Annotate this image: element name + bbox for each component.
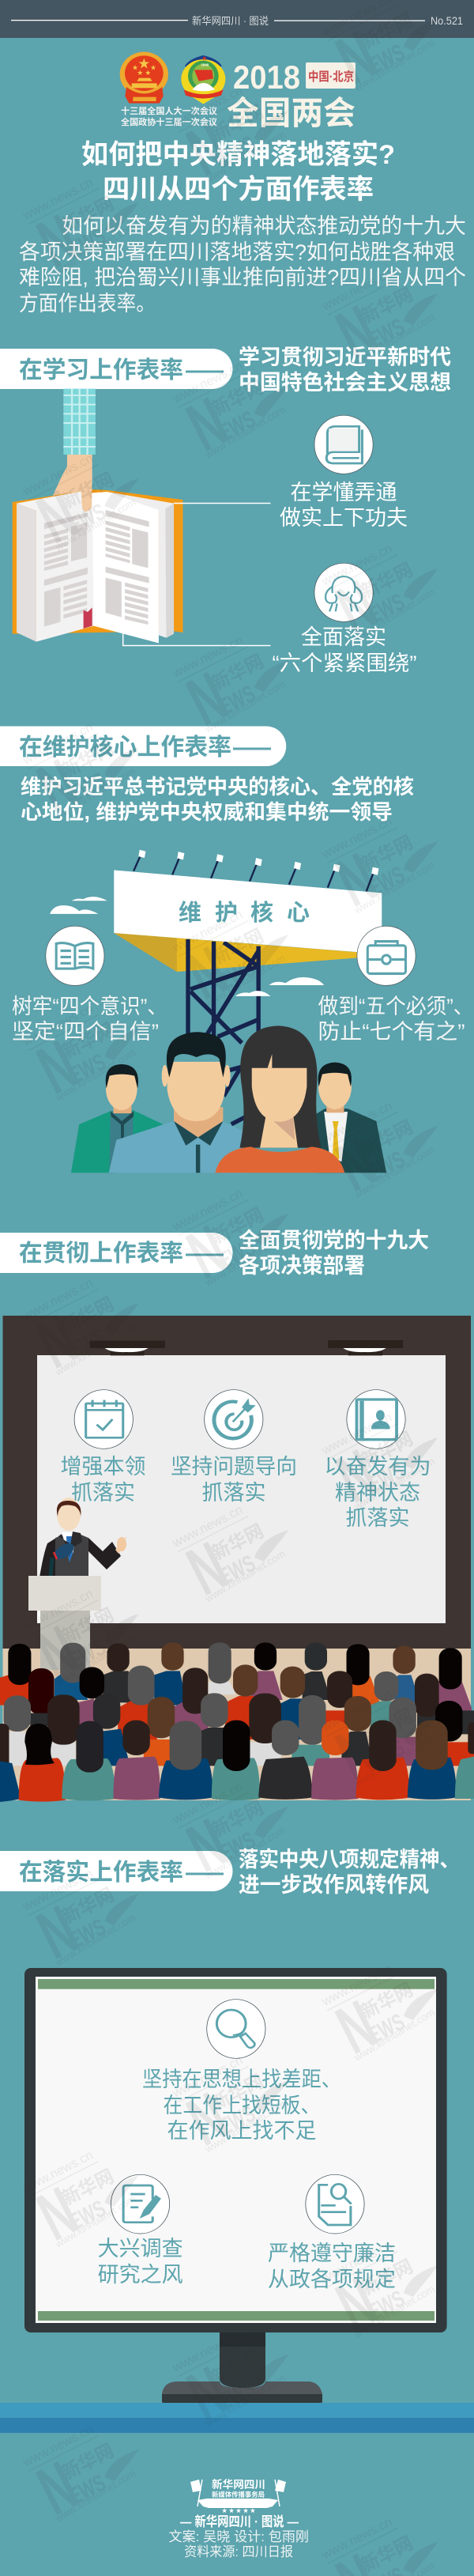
monitor text: left: 研究之风: [98, 2263, 183, 2287]
screen text: column 2: 抓落实: [202, 1481, 265, 1505]
watermarks: www.xinhuanet.com: [352, 859, 437, 916]
watermarks: N: [26, 476, 89, 558]
watermarks: www.xinhuanet.com: [352, 2006, 437, 2064]
watermarks: www.news.cn: [319, 1962, 394, 2009]
icon: contact book: [347, 1390, 405, 1449]
footer credits: 文案: 吴晓 设计: 包雨刚: [169, 2529, 309, 2544]
icon: national emblem: [120, 52, 168, 104]
section 2 subtitle: 心地位, 维护党中央权威和集中统一领导: [21, 800, 393, 824]
person: left man: [71, 1064, 164, 1173]
text: study: 做实上下功夫: [280, 506, 408, 530]
intro paragraph: 各项决策部署在四川落地落实?如何战胜各种艰: [19, 240, 455, 264]
watermarks: N: [325, 1435, 388, 1517]
watermarks: www.xinhuanet.com: [52, 1046, 137, 1104]
watermarks: www.news.cn: [170, 1187, 245, 1234]
watermarks: N: [26, 2447, 89, 2529]
monitor text: top: 在工作上找短板、: [163, 2094, 321, 2117]
section 4 subtitle: [239, 1848, 460, 1897]
middle row: [28, 1664, 442, 1739]
section 1 heading pill: 在学习上作表率: [19, 357, 183, 383]
watermarks: www.xinhuanet.com: [202, 1547, 288, 1605]
text: four consciousness: 坚定“四个自信”: [12, 1020, 159, 1044]
section 4 subtitle: 落实中央八项规定精神、: [239, 1848, 460, 1872]
watermarks: N: [176, 932, 239, 1014]
footer credits: — 新华网四川 · 图说 —: [180, 2514, 299, 2529]
icon: people embrace: [314, 563, 373, 621]
watermarks: EWS: [364, 589, 409, 629]
watermarks: EWS: [215, 955, 260, 995]
watermarks: N: [176, 1211, 239, 1294]
icon: CPPCC emblem: [181, 55, 225, 104]
watermarks: www.news.cn: [319, 1099, 394, 1146]
screen text: column 1: 增强本领: [60, 1455, 145, 1479]
section 4 heading pill: ——: [186, 1860, 224, 1886]
monitor text: left: [98, 2237, 183, 2287]
watermarks: www.news.cn: [170, 1503, 245, 1551]
text: study: [280, 481, 408, 530]
watermarks: www.news.cn: [319, 2238, 394, 2286]
monitor text: top: 坚持在思想上找差距、: [142, 2068, 341, 2091]
text: four consciousness: [12, 995, 167, 1044]
watermarks: EWS: [215, 2375, 260, 2415]
screen text: column 3: 精神状态: [335, 1481, 420, 1505]
watermarks: www.news.cn: [319, 1687, 394, 1735]
watermarks: N: [325, 1124, 388, 1206]
watermarks: 新华网: [358, 9, 416, 54]
watermarks: www.xinhuanet.com: [202, 1824, 288, 1882]
screen text: column 3: [324, 1455, 431, 1530]
watermarks: EWS: [65, 2196, 110, 2236]
monitor text: top: 在作风上找不足: [167, 2119, 316, 2143]
icon: target: [205, 1390, 263, 1449]
text: study: 在学懂弄通: [291, 481, 397, 504]
watermarks: EWS: [364, 314, 409, 354]
monitor text: right: 严格遵守廉洁: [268, 2242, 396, 2265]
watermarks: 新华网: [209, 2071, 267, 2115]
watermarks: www.news.cn: [319, 1411, 394, 1458]
watermarks: www.news.cn: [21, 176, 96, 223]
watermarks: EWS: [65, 223, 110, 263]
watermarks: 新华网: [358, 2533, 416, 2576]
watermarks: www.xinhuanet.com: [202, 403, 288, 461]
watermarks: N: [325, 839, 388, 921]
clouds: [50, 897, 324, 996]
icon: national emblem: ★: [137, 70, 144, 77]
screen text: column 1: [60, 1455, 145, 1505]
illustration: audience crowd: [0, 1642, 474, 1802]
watermarks: www.xinhuanet.com: [52, 765, 137, 822]
watermarks: N: [325, 291, 388, 373]
watermarks: www.xinhuanet.com: [202, 2372, 288, 2430]
watermarks: EWS: [215, 1234, 260, 1275]
watermarks: www.news.cn: [319, 2515, 394, 2563]
watermarks: www.xinhuanet.com: [52, 496, 137, 553]
intro paragraph: 方面作出表率。: [19, 292, 156, 315]
watermarks: N: [26, 1026, 89, 1109]
watermarks: www.xinhuanet.com: [202, 1231, 288, 1289]
watermarks: N: [26, 745, 89, 827]
screen: [37, 1355, 446, 1623]
section 1 subtitle: 学习贯彻习近平新时代: [239, 346, 451, 369]
section 3 heading pill: [0, 1233, 232, 1273]
watermarks: N: [176, 1528, 239, 1610]
watermarks: N: [176, 658, 239, 740]
intro paragraph: 难险阻, 把治蜀兴川事业推向前进?四川省从四个: [19, 266, 466, 289]
watermarks: www.news.cn: [319, 814, 394, 862]
person: right man: [314, 1063, 386, 1173]
watermarks: www.xinhuanet.com: [202, 952, 288, 1010]
watermarks: www.news.cn: [170, 84, 245, 131]
footer logo: 新媒体传播事务局: [212, 2491, 265, 2499]
icon: national emblem: ★: [150, 64, 156, 71]
watermarks: www.xinhuanet.com: [52, 220, 137, 278]
watermarks: www.xinhuanet.com: [52, 1911, 137, 1969]
watermarks: 新华网: [209, 925, 267, 969]
watermarks: N: [26, 1301, 89, 1383]
screen text: column 1: 抓落实: [71, 1481, 135, 1505]
watermarks: 新华网: [58, 1294, 118, 1338]
header bar: No.521: [431, 15, 463, 27]
watermarks: www.news.cn: [170, 633, 245, 681]
text: five musts: [318, 995, 474, 1044]
watermarks: www.xinhuanet.com: [202, 2098, 288, 2155]
section 3 heading pill: ——: [186, 1241, 224, 1267]
watermarks: N: [325, 17, 388, 99]
watermarks: www.xinhuanet.com: [52, 1320, 137, 1378]
watermarks: EWS: [65, 1914, 110, 1955]
watermarks: 新华网: [358, 284, 416, 328]
watermarks: 新华网: [358, 1979, 416, 2023]
emblem caption: [121, 105, 217, 127]
sleeve: [63, 389, 96, 455]
watermarks: 新华网: [209, 2345, 267, 2389]
watermarks: www.xinhuanet.com: [202, 678, 288, 735]
watermarks: www.xinhuanet.com: [52, 2467, 137, 2525]
watermarks: N: [325, 2263, 388, 2345]
stage lights: [90, 1340, 403, 1355]
intro paragraph: 如何以奋发有为的精神状态推动党的十九大: [62, 214, 466, 238]
icon: national emblem: ★: [138, 58, 150, 70]
watermarks: www.xinhuanet.com: [352, 586, 437, 644]
text: six tight: [272, 625, 417, 675]
watermarks: 新华网: [58, 2440, 118, 2484]
title: 2018 全国两会: [227, 59, 356, 131]
watermarks: EWS: [65, 2470, 110, 2510]
text: six tight: 全面落实: [301, 625, 386, 649]
section 4 heading pill: [0, 1851, 232, 1891]
watermarks: EWS: [65, 1049, 110, 1090]
watermarks: www.xinhuanet.com: [202, 128, 288, 186]
watermarks: www.xinhuanet.com: [352, 1732, 437, 1789]
watermarks: 新华网: [209, 376, 267, 421]
watermarks: 新华网: [58, 469, 118, 513]
screen text: column 2: 坚持问题导向: [171, 1455, 297, 1479]
watermarks: EWS: [215, 681, 260, 721]
watermarks: 新华网: [209, 1520, 267, 1565]
watermarks: www.news.cn: [21, 2148, 96, 2196]
emblem caption: 全国政协十三届一次会议: [121, 116, 217, 127]
icon: briefcase: [357, 926, 416, 985]
monitor: [24, 1968, 447, 2403]
watermarks: www.xinhuanet.com: [352, 1143, 437, 1201]
screen text: column 3: 抓落实: [346, 1506, 409, 1530]
section 1 heading pill: [0, 349, 232, 389]
stage wall and screen: [3, 1316, 471, 1800]
watermarks: 新华网: [58, 1019, 118, 1063]
icon: document and pen: [111, 2174, 170, 2234]
section 1 subtitle: 中国特色社会主义思想: [239, 371, 451, 395]
monitor text: left: 大兴调查: [98, 2237, 183, 2261]
watermarks: EWS: [65, 1324, 110, 1364]
main heading: 如何把中央精神落地落实?: [81, 140, 395, 170]
watermarks: N: [26, 200, 89, 282]
watermarks: www.news.cn: [21, 1002, 96, 1049]
section 3 subtitle: 全面贯彻党的十九大: [239, 1229, 429, 1252]
watermarks: N: [176, 1804, 239, 1887]
watermarks: www.xinhuanet.com: [52, 2193, 137, 2250]
section 1 heading pill: ——: [186, 357, 224, 383]
second row: [3, 1693, 474, 1766]
watermarks: EWS: [65, 1634, 110, 1675]
monitor text: top: [142, 2068, 341, 2143]
watermarks: 新华网: [58, 1884, 118, 1928]
icon: magnifier: [207, 2000, 265, 2058]
watermarks: EWS: [65, 499, 110, 539]
illustration: billboard and tower: [114, 850, 382, 1124]
watermarks: 新华网: [358, 559, 416, 603]
watermarks: EWS: [215, 2101, 260, 2141]
text: four consciousness: 树牢“四个意识”、: [12, 995, 167, 1018]
title: 2018 全国两会: 全国两会: [227, 95, 356, 131]
section 1 subtitle: [239, 346, 451, 395]
watermarks: www.news.cn: [170, 359, 245, 406]
watermarks: www.news.cn: [170, 1780, 245, 1827]
front row: [0, 1720, 474, 1802]
icon: CPPCC emblem: 1949: [201, 62, 209, 66]
icon: national emblem: ★: [145, 70, 152, 77]
icon: document and magnifier: [306, 2174, 364, 2234]
watermarks: www.news.cn: [170, 2328, 245, 2375]
header bar: [0, 0, 474, 38]
watermarks: 新华网: [209, 101, 267, 145]
illustration: speaker at podium: [40, 1498, 126, 1577]
footer credits: 资料来源: 四川日报: [184, 2544, 293, 2559]
watermarks: EWS: [364, 2009, 409, 2049]
text: six tight: “六个紧紧围绕”: [272, 652, 417, 675]
person: centre man: [109, 1032, 246, 1173]
watermarks: EWS: [364, 40, 409, 80]
footer logo: 新华网四川: [212, 2478, 265, 2491]
section 3 subtitle: [239, 1229, 429, 1278]
screen text: column 3: 以奋发有为: [324, 1455, 431, 1479]
watermarks: 新华网: [209, 1204, 267, 1248]
watermarks: 新华网: [58, 193, 118, 237]
watermarks: www.xinhuanet.com: [352, 2283, 437, 2340]
footer logo: ★ ★ ★ ★ ★: [222, 2508, 255, 2514]
watermarks: 新华网: [58, 1604, 118, 1649]
watermarks: www.news.cn: [21, 2423, 96, 2470]
desk bands: [0, 2403, 474, 2433]
watermarks: N: [26, 2173, 89, 2255]
watermarks: www.news.cn: [170, 908, 245, 955]
watermarks: EWS: [65, 768, 110, 808]
icon: CPPCC emblem: ★: [201, 56, 207, 62]
illustration: four people: [71, 1025, 386, 1173]
watermarks: EWS: [364, 1146, 409, 1187]
section 4 heading pill: 在落实上作表率: [19, 1860, 183, 1886]
section 2 heading pill: ——: [233, 735, 271, 761]
watermarks: N: [176, 2352, 239, 2434]
header bar: 新华网四川 · 图说: [192, 15, 269, 27]
emblem caption: 十三届全国人大一次会议: [121, 105, 217, 116]
back row: [0, 1642, 472, 1713]
watermarks: www.xinhuanet.com: [352, 36, 437, 94]
watermarks: EWS: [215, 406, 260, 447]
watermarks: www.news.cn: [21, 1867, 96, 1914]
intro paragraph: [19, 214, 466, 315]
section 2 subtitle: 维护习近平总书记党中央的核心、全党的核: [21, 775, 414, 799]
person: woman: [215, 1025, 344, 1173]
podium: [28, 1576, 101, 1670]
watermarks: N: [325, 566, 388, 648]
watermarks: N: [325, 1712, 388, 1794]
icon: national emblem: ★: [132, 64, 138, 71]
watermarks: EWS: [364, 862, 409, 902]
footer credits: [169, 2514, 309, 2559]
watermarks: www.news.cn: [21, 1587, 96, 1634]
watermarks: 新华网: [58, 2166, 118, 2210]
watermarks: www.news.cn: [21, 720, 96, 768]
connector lines: [123, 503, 270, 645]
main heading: [81, 140, 395, 205]
watermarks: www.xinhuanet.com: [352, 311, 437, 368]
watermarks: EWS: [215, 131, 260, 172]
watermarks: N: [176, 383, 239, 466]
watermarks: www.xinhuanet.com: [52, 1631, 137, 1689]
section 2 heading pill: 在维护核心上作表率: [19, 735, 231, 761]
watermarks: 新华网: [358, 1705, 416, 1749]
watermarks: 新华网: [209, 1797, 267, 1841]
section 2 subtitle: [21, 775, 414, 824]
section 4 subtitle: 进一步改作风转作风: [239, 1873, 429, 1897]
watermarks: N: [176, 108, 239, 191]
title: 2018 全国两会: 2018: [233, 59, 300, 96]
watermarks: www.news.cn: [319, 542, 394, 589]
watermarks: www.xinhuanet.com: [352, 1455, 437, 1513]
illustration: hand holding open book: [13, 389, 183, 643]
section 2 heading pill: [0, 726, 286, 766]
icon: calendar: [74, 1390, 133, 1449]
watermarks: EWS: [215, 1551, 260, 1591]
icon: open book: [46, 926, 104, 985]
watermarks: 新华网: [209, 651, 267, 695]
monitor text: right: 从政各项规定: [268, 2268, 396, 2291]
footer logo: [190, 2478, 286, 2514]
watermarks: EWS: [364, 2286, 409, 2326]
watermarks: 新华网: [358, 1428, 416, 1472]
watermarks: EWS: [364, 1735, 409, 1775]
watermarks: EWS: [215, 1827, 260, 1868]
watermarks: www.news.cn: [21, 1276, 96, 1324]
main heading: 四川从四个方面作表率: [103, 175, 374, 205]
monitor text: right: [268, 2242, 396, 2291]
text: five musts: 防止“七个有之”: [318, 1020, 465, 1044]
screen text: column 2: [171, 1455, 297, 1505]
watermarks: www.news.cn: [319, 266, 394, 314]
watermarks: www.news.cn: [170, 2053, 245, 2101]
watermarks: 新华网: [58, 738, 118, 782]
watermarks: N: [176, 2078, 239, 2160]
watermarks: N: [26, 1891, 89, 1974]
title: 2018 全国两会: 中国·北京: [308, 69, 354, 84]
watermarks: 新华网: [358, 2256, 416, 2300]
watermarks: 新华网: [358, 1116, 416, 1161]
watermarks: www.news.cn: [21, 451, 96, 499]
section 3 heading pill: 在贯彻上作表率: [19, 1241, 183, 1267]
billboard text: 维护核心: [179, 900, 310, 926]
watermarks: 新华网: [358, 832, 416, 876]
watermarks: N: [26, 1611, 89, 1694]
watermarks: N: [325, 1986, 388, 2068]
watermarks: EWS: [364, 1458, 409, 1498]
icon: book: [314, 415, 373, 474]
section 3 subtitle: 各项决策部署: [239, 1254, 365, 1278]
